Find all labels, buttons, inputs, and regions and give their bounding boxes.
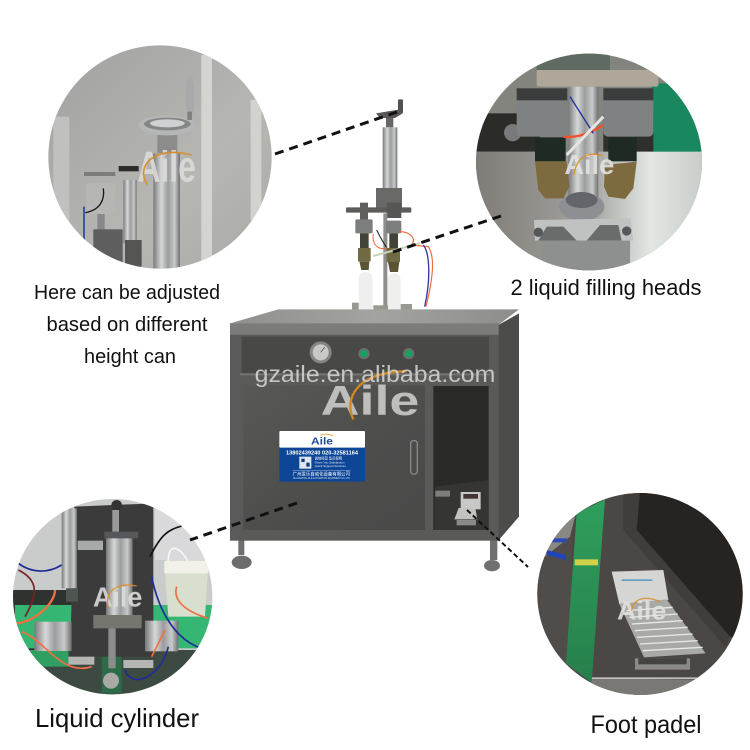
photo circle: foot pedal: [537, 493, 743, 695]
caption: height adjustment: based on different: [46, 313, 208, 336]
company label: 广州爱乐自动化设备有限公司: [293, 471, 350, 478]
watermark url: gzaile.en.alibaba.com: [255, 361, 495, 387]
cabinet side: [498, 313, 519, 541]
center pole: [568, 87, 598, 210]
company label: [279, 431, 365, 482]
watermark logo: Aile: [93, 582, 142, 613]
company label: 诚信经营 售后保障: [315, 456, 343, 461]
foot pedal: [612, 570, 706, 670]
company label: Given You Satisfaction: [315, 460, 345, 464]
dark wall: [636, 493, 743, 638]
photo circle: two liquid filling heads: [476, 54, 702, 270]
watermark logo: Aile: [137, 143, 196, 191]
open compartment: [433, 386, 489, 530]
photo circle: height adjustment handwheel: [48, 45, 272, 269]
main logo: Aile: [321, 377, 419, 424]
handwheel: [139, 97, 194, 136]
watermark logo: Aile: [564, 149, 614, 180]
horizontal cylinders: [34, 622, 72, 651]
green button right: [403, 348, 414, 359]
filling rod: [383, 213, 387, 307]
caption: liquid cylinder: Liquid cylinder: [35, 703, 199, 733]
green button left: [358, 348, 370, 359]
right head: [603, 88, 653, 199]
green post: [566, 499, 605, 683]
company label: 13802439240 020-32581164: [286, 450, 359, 456]
company label: GUANGZHOU AILE AUTOMATION EQUIPMENT CO.,LTD: [293, 477, 350, 480]
guide column: [383, 127, 397, 188]
crossbar: [537, 70, 658, 87]
foot pedal in compartment: [454, 492, 481, 525]
company label: Aile: [311, 437, 333, 448]
background gauge: [504, 124, 521, 141]
watermark logo: Aile: [617, 595, 666, 625]
cabinet door: [243, 385, 425, 530]
caption: foot pedal: Foot padel: [590, 711, 702, 739]
caption: height adjustment: [34, 281, 220, 368]
bottle bracket: [534, 218, 633, 272]
arrow: cylinder callout line: [190, 503, 297, 540]
bottle bracket: [352, 303, 412, 319]
left background: [537, 520, 572, 670]
arrow: foot pedal callout line: [467, 510, 528, 567]
cabinet front frame: [230, 323, 499, 541]
tubes: [17, 526, 208, 680]
machine: filling head assembly: [346, 99, 433, 319]
main logo: [321, 371, 419, 424]
company label: Quick Support Services: [315, 464, 346, 468]
left head: [517, 88, 569, 198]
tube fittings: [68, 657, 94, 665]
liquid cylinder: [93, 500, 142, 689]
pressure gauge: [310, 341, 332, 363]
floor strip: [590, 679, 694, 695]
caption: filling heads: 2 liquid filling heads: [510, 275, 702, 300]
cabinet legs: [232, 538, 500, 571]
arrow: handwheel callout line: [275, 111, 400, 154]
tabletop: [230, 309, 519, 325]
arrow: filling heads callout line: [393, 216, 501, 252]
dark centre plate: [70, 503, 153, 657]
photo circle: liquid cylinder: [13, 499, 212, 694]
lower machine base: [29, 650, 196, 694]
white bottles: [359, 272, 401, 315]
caption: height adjustment: Here can be adjusted: [34, 281, 220, 304]
small machine in background: [84, 166, 142, 267]
mount block and crossbar: [346, 188, 411, 220]
caption: height adjustment: height can: [84, 345, 176, 368]
watermark logo: [565, 154, 614, 175]
watermark logo: [138, 150, 195, 186]
machine: cabinet: [230, 309, 519, 571]
silver rod: [62, 508, 77, 588]
wires: [563, 97, 603, 155]
base flange: [559, 195, 604, 220]
top handle: [376, 99, 403, 127]
left filling head: [355, 219, 373, 270]
white bucket: [164, 548, 208, 617]
right filling head: [386, 221, 401, 272]
main column: [153, 153, 180, 270]
door handle: [411, 441, 417, 474]
hoses: [373, 230, 433, 307]
control panel: [242, 337, 489, 374]
